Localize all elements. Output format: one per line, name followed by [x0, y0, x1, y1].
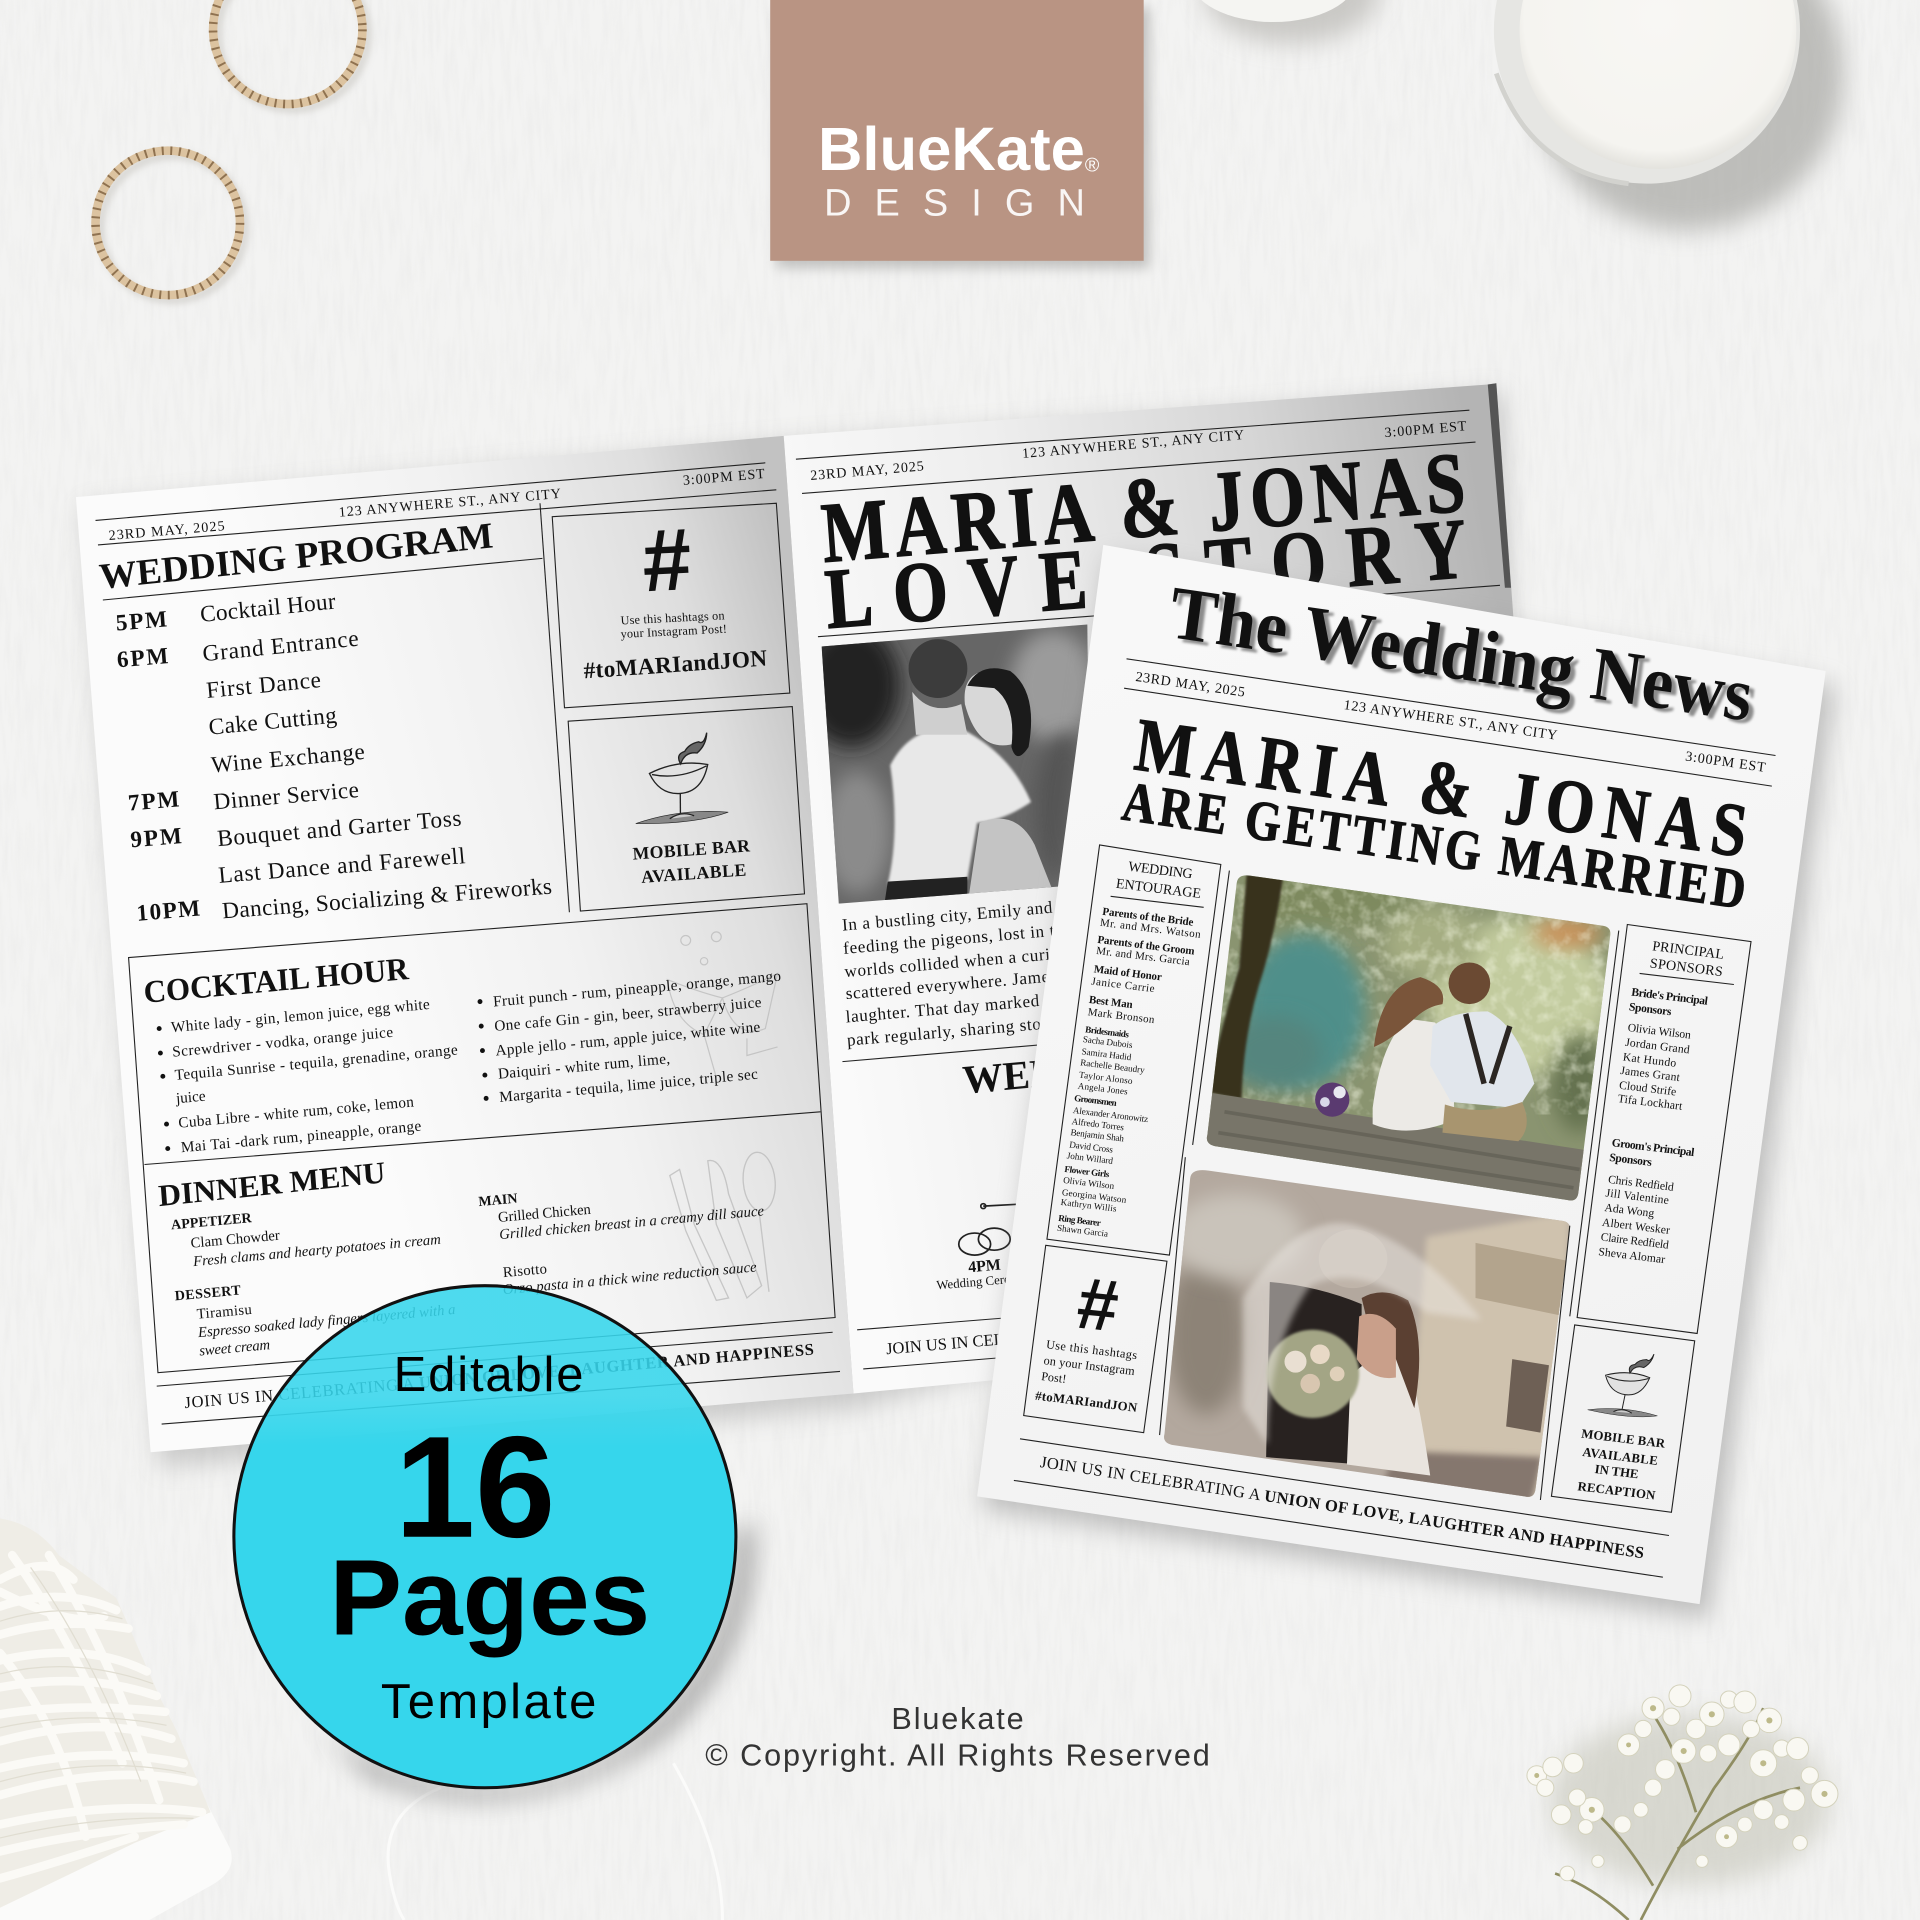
schedule list — [115, 589, 553, 927]
masthead shadow: The Wedding News — [1170, 574, 1763, 741]
hashtag prompt third line: Post! — [1040, 1369, 1067, 1386]
rule under headline — [818, 585, 1500, 637]
cocktail list left — [170, 996, 459, 1156]
entourage names: Maid of Honor — [1093, 963, 1163, 983]
cocktail and dinner box — [129, 904, 835, 1373]
header rules — [96, 463, 776, 545]
cocktail list right: Margarita - tequila, lime juice, triple sec — [499, 1066, 759, 1106]
registered mark: ® — [1085, 154, 1100, 176]
principal sponsors box — [1577, 924, 1751, 1333]
cocktail list left: White lady - gin, lemon juice, egg white — [170, 996, 430, 1036]
dinner menu heading: DINNER MENU — [157, 1155, 387, 1213]
entourage heading second line: ENTOURAGE — [1115, 876, 1202, 902]
dinner menu main: Risotto — [502, 1261, 547, 1281]
schedule list: Bouquet and Garter Toss — [216, 805, 462, 852]
cocktail list right: Daiquiri - white rum, lime, — [497, 1050, 671, 1083]
sponsors heading second line: SPONSORS — [1649, 955, 1724, 980]
mobile bar text: MOBILE BAR — [632, 835, 751, 864]
front page shadow — [982, 557, 1834, 1619]
groom's sponsors: Jill Valentine — [1605, 1186, 1670, 1207]
hash icon: # — [639, 509, 694, 610]
cocktail list left: Mai Tai -dark rum, pineapple, orange — [180, 1118, 422, 1156]
footer rules — [1014, 1439, 1669, 1577]
dinner menu dessert: Espresso soaked lady fingers layered with a — [196, 1302, 456, 1341]
timeline time: 4PM — [968, 1257, 1001, 1276]
dinner menu appetizer: Clam Chowder — [190, 1228, 280, 1252]
bride's sponsors — [1617, 986, 1709, 1113]
entourage box: Georgina Watson — [1061, 1187, 1127, 1205]
yarn spool bottom left — [0, 1518, 232, 1920]
rings icon — [959, 1204, 1029, 1255]
entourage names: Mr. and Mrs. Garcia — [1096, 945, 1191, 968]
schedule list: 6PM — [116, 643, 169, 673]
hashtag prompt second line: on your Instagram — [1043, 1353, 1136, 1378]
schedule list: 5PM — [115, 606, 168, 637]
wedding timeline heading: WEDDING — [961, 1040, 1166, 1102]
cocktail glass icon — [1588, 1346, 1666, 1421]
story headline second line: LOVE STORY — [822, 500, 1470, 647]
hashtag box — [552, 503, 790, 708]
panel: wedding program left page — [76, 436, 853, 1452]
footer text: JOIN US IN CELEBRATING — [885, 1322, 1086, 1358]
hashtag prompt: Use this hashtags — [1045, 1337, 1138, 1362]
entourage names: Janice Carrie — [1091, 976, 1155, 995]
groom's sponsors: Sponsors — [1609, 1151, 1653, 1169]
header address: 123 ANYWHERE ST., ANY CITY — [1022, 427, 1245, 462]
cocktail list left: juice — [174, 1088, 206, 1107]
header rules — [1124, 659, 1776, 786]
footer message: JOIN US IN CELEBRATING A UNION OF LOVE, LAUGHTER AND HAPPINESS — [1039, 1452, 1645, 1562]
small candle at top edge — [1190, 0, 1380, 44]
dinner menu main: Grilled Chicken — [497, 1202, 592, 1226]
dinner menu main: Orzo pasta in a thick wine reduction sauce — [502, 1259, 758, 1298]
badge line: template: Template — [381, 1675, 596, 1729]
header date: 23RD MAY, 2025 — [108, 518, 225, 544]
dinner menu dessert: Tiramisu — [196, 1302, 253, 1323]
cocktail list right: Apple jello - rum, apple juice, white wine — [495, 1019, 761, 1059]
header time: 3:00PM EST — [1684, 749, 1767, 776]
schedule list: Cake Cutting — [208, 703, 338, 741]
dinner menu main: Grilled chicken breast in a creamy dill sauce — [499, 1203, 765, 1243]
entourage box: Groomsmen — [1074, 1093, 1117, 1108]
cocktail glass icon — [630, 732, 729, 825]
gold rope ring top — [213, 0, 367, 109]
hashtag prompt: Use this hashtags on — [620, 608, 725, 627]
entourage box: Alexander Aronowitz — [1072, 1105, 1149, 1124]
entourage box: Sacha Dubois — [1082, 1034, 1134, 1050]
schedule list: 10PM — [136, 895, 201, 927]
header address: 123 ANYWHERE ST., ANY CITY — [1343, 697, 1558, 744]
header rules — [796, 410, 1476, 493]
entourage names: Parents of the Groom — [1097, 934, 1195, 958]
footer rules — [157, 1332, 840, 1424]
hashtag: #toMARIandJON — [583, 646, 768, 684]
mobile bar second line: AVAILABLE — [641, 860, 747, 887]
bride's sponsors: Sponsors — [1628, 1000, 1673, 1018]
groom's sponsors: Groom's Principal — [1611, 1136, 1696, 1159]
gold rope ring lower — [96, 151, 245, 300]
dinner menu dessert: sweet cream — [199, 1337, 271, 1359]
badge line: editable: Editable — [394, 1348, 583, 1402]
cocktail list right: Fruit punch - rum, pineapple, orange, mango — [492, 968, 782, 1011]
entourage names: Best Man — [1088, 994, 1133, 1011]
bride's sponsors: Bride's Principal — [1631, 986, 1709, 1008]
header time: 3:00PM EST — [1384, 418, 1467, 441]
entourage box — [1047, 845, 1229, 1255]
copyright name: Bluekate — [891, 1702, 1024, 1736]
entourage box: David Cross — [1069, 1139, 1114, 1155]
thread — [388, 1763, 722, 1920]
schedule list: Last Dance and Farewell — [217, 843, 466, 889]
bride's sponsors: Tifa Lockhart — [1617, 1092, 1684, 1113]
hashtag: #toMARIandJON — [1034, 1389, 1139, 1415]
dinner menu dessert: DESSERT — [174, 1282, 242, 1304]
open booklet shadow — [83, 392, 1531, 1467]
panel: the wedding news front page — [977, 545, 1826, 1604]
entourage box: Rachelle Beaudry — [1080, 1057, 1146, 1075]
baby's breath flowers — [1527, 1685, 1838, 1920]
dinner menu main — [478, 1191, 765, 1298]
entourage box: Ring Bearer — [1058, 1213, 1101, 1228]
entourage names: Parents of the Bride — [1102, 906, 1194, 929]
story body text: scattered everywhere. James — [845, 966, 1058, 1003]
faint cutlery — [670, 1151, 778, 1300]
mobile bar fourth line: RECAPTION — [1577, 1479, 1657, 1503]
cocktail list left: Cuba Libre - white rum, coke, lemon — [178, 1093, 415, 1132]
mobile bar box — [1551, 1325, 1695, 1512]
story body text: park regularly, sharing stories — [846, 1012, 1069, 1050]
groom's sponsors — [1598, 1136, 1696, 1266]
black and white couple photo — [822, 624, 1088, 904]
brand tag — [770, 0, 1150, 268]
header date: 23RD MAY, 2025 — [1135, 669, 1246, 701]
entourage box: John Willard — [1066, 1150, 1114, 1166]
brand name: BlueKate — [818, 115, 1085, 183]
photo: couple under veil — [1164, 1170, 1570, 1497]
large candle top right — [1494, 0, 1844, 230]
entourage names — [1087, 906, 1202, 1026]
dinner menu appetizer: APPETIZER — [171, 1210, 253, 1233]
hashtag prompt second line: your Instagram Post! — [620, 622, 727, 641]
entourage box: Kathryn Willis — [1060, 1197, 1118, 1214]
dinner menu dessert — [174, 1282, 456, 1359]
story body text: worlds collided when a curious — [844, 942, 1077, 981]
entourage box: Bridesmaids — [1085, 1024, 1130, 1040]
mobile bar box — [568, 707, 804, 911]
groom's sponsors: Claire Redfield — [1600, 1230, 1670, 1252]
badge: editable 16 pages template — [234, 1286, 736, 1788]
photo: couple sitting on dock — [1206, 875, 1610, 1200]
vertical dividers — [1160, 931, 1619, 1500]
story body text: In a bustling city, Emily and Jonas — [841, 894, 1099, 935]
groom's sponsors: Albert Wesker — [1601, 1216, 1671, 1237]
copyright notice — [705, 1702, 1210, 1773]
cocktail list left: Tequila Sunrise - tequila, grenadine, orange — [174, 1041, 459, 1084]
headline names: MARIA & JONAS — [1130, 703, 1752, 874]
header date: 23RD MAY, 2025 — [810, 458, 924, 484]
header address: 123 ANYWHERE ST., ANY CITY — [338, 486, 561, 521]
bride's sponsors: Olivia Wilson — [1627, 1021, 1692, 1042]
groom's sponsors: Chris Redfield — [1607, 1173, 1675, 1194]
timeline caption: Wedding Ceremony — [936, 1270, 1040, 1292]
bride's sponsors: James Grant — [1620, 1064, 1681, 1084]
badge line: pages: Pages — [329, 1537, 650, 1658]
cocktail hour heading: COCKTAIL HOUR — [142, 951, 411, 1010]
story body text: feeding the pigeons, lost in their — [843, 918, 1085, 958]
mobile bar second line: AVAILABLE — [1582, 1445, 1659, 1468]
faint coupe glasses — [667, 932, 778, 1078]
cocktail list left: Screwdriver - vodka, orange juice — [172, 1024, 394, 1061]
groom's sponsors: Ada Wong — [1604, 1201, 1655, 1220]
vertical divider — [540, 503, 569, 912]
entourage box: Flower Girls — [1064, 1164, 1110, 1179]
story body text: laughter. That day marked the — [845, 989, 1068, 1026]
cocktail list right: One cafe Gin - gin, beer, strawberry juice — [494, 994, 762, 1035]
footer message: JOIN US IN CELEBRATING A UNION OF LOVE, LAUGHTER AND HAPPINESS — [184, 1339, 815, 1412]
entourage box: Benjamin Shah — [1070, 1127, 1125, 1144]
hash icon: # — [1073, 1263, 1122, 1347]
headline subtitle: ARE GETTING MARRIED — [1119, 771, 1749, 922]
masthead: The Wedding News — [1165, 570, 1758, 738]
entourage names: Mr. and Mrs. Watson — [1099, 917, 1202, 941]
header time: 3:00PM EST — [682, 466, 766, 489]
mobile bar text: MOBILE BAR — [1580, 1427, 1667, 1451]
groom's sponsors: Sheva Alomar — [1598, 1245, 1666, 1266]
bride's sponsors: Cloud Strife — [1618, 1079, 1677, 1098]
hashtag box — [1024, 1245, 1167, 1433]
schedule list: Wine Exchange — [210, 739, 366, 779]
schedule list: First Dance — [205, 667, 322, 704]
story headline: MARIA & JONAS — [818, 434, 1468, 581]
schedule list: Cocktail Hour — [199, 589, 337, 628]
dinner menu appetizer: Fresh clams and hearty potatoes in cream — [192, 1232, 441, 1270]
schedule list: 9PM — [130, 823, 183, 853]
brand subtitle: DESIGN — [824, 183, 1085, 225]
entourage box: Samira Hadid — [1081, 1046, 1132, 1062]
dinner menu main: MAIN — [478, 1191, 518, 1210]
dinner menu appetizer — [171, 1210, 441, 1270]
schedule list: Grand Entrance — [201, 626, 360, 667]
badge number: 16 — [395, 1406, 555, 1568]
entourage box: Alfredo Torres — [1071, 1116, 1125, 1132]
mobile bar third line: IN THE — [1594, 1462, 1639, 1481]
entourage box: Angela Jones — [1077, 1081, 1129, 1097]
entourage names: Mark Bronson — [1087, 1006, 1156, 1026]
schedule list: Dancing, Socializing & Fireworks — [221, 874, 553, 924]
cocktail list left bullets — [157, 1026, 170, 1151]
copyright line: © Copyright. All Rights Reserved — [705, 1739, 1210, 1773]
entourage heading: WEDDING — [1127, 859, 1194, 882]
cocktail list right bullets — [478, 999, 489, 1101]
badge shadow — [306, 1518, 753, 1799]
bride's sponsors: Kat Hundo — [1622, 1050, 1677, 1070]
schedule list: 7PM — [127, 786, 180, 817]
entourage box: Olivia Wilson — [1063, 1175, 1115, 1191]
cocktail list right — [492, 968, 782, 1106]
sponsors heading: PRINCIPAL — [1651, 938, 1725, 963]
bride's sponsors: Jordan Grand — [1624, 1036, 1691, 1057]
entourage box: Shawn Garcia — [1056, 1223, 1109, 1239]
program heading: WEDDING PROGRAM — [97, 514, 495, 597]
entourage box: Taylor Alonso — [1079, 1070, 1134, 1086]
panel: wedding story right page — [784, 383, 1518, 1393]
story body text — [841, 894, 1099, 1050]
schedule list: Dinner Service — [212, 777, 360, 815]
